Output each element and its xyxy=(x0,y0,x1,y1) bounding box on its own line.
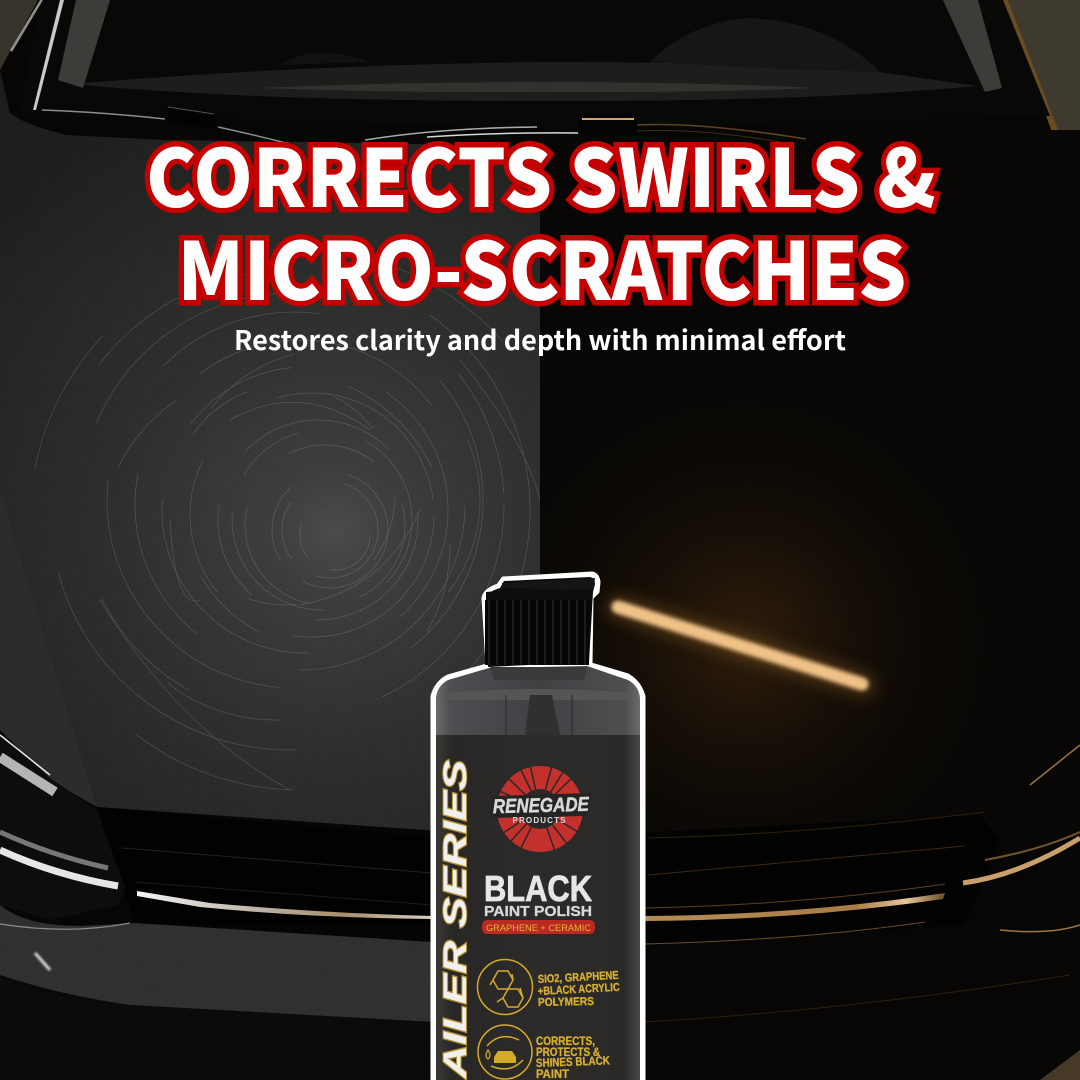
logo sunburst: PRODUCTS xyxy=(512,816,566,825)
hood left half: swirled paint xyxy=(0,70,570,850)
bottle white outline xyxy=(432,573,644,1080)
product name xyxy=(484,868,592,920)
red pill: GRAPHENE + CERAMIC xyxy=(486,923,591,934)
chrome strip left xyxy=(137,891,433,919)
hood right half: corrected paint with light reflection xyxy=(592,130,1080,800)
icon: molecule xyxy=(478,960,532,1014)
bottle body xyxy=(436,666,640,1080)
feature text: ingredients: POLYMERS xyxy=(538,996,594,1009)
product bottle xyxy=(432,573,644,1080)
wipers and cowl trim xyxy=(42,107,806,144)
bumper left xyxy=(0,905,432,1080)
bumper right xyxy=(645,975,1080,1080)
feature text: ingredients: +BLACK ACRYLIC xyxy=(538,982,620,998)
swirl micro-scratches xyxy=(30,250,570,790)
title: CORRECTS SWIRLS & xyxy=(146,115,936,231)
product name: BLACK xyxy=(484,868,592,909)
feature text: benefits: SHINES BLACK xyxy=(536,1053,610,1070)
icon: car with arrows xyxy=(478,1025,532,1079)
subtitle: Restores clarity and depth with minimal effort xyxy=(234,319,846,358)
logo sunburst: RENEGADE xyxy=(493,794,590,818)
headlight right xyxy=(963,745,1080,932)
title xyxy=(146,115,936,324)
garage wall corners xyxy=(0,0,1080,150)
logo sunburst xyxy=(491,765,592,852)
reflected light bar xyxy=(618,607,864,685)
feature text: ingredients xyxy=(538,970,620,1009)
feature text: benefits: PROTECTS & xyxy=(536,1045,600,1059)
feature text: ingredients: SIO2, GRAPHENE xyxy=(538,970,619,986)
product name: PAINT POLISH xyxy=(484,903,592,920)
flip cap xyxy=(485,577,595,667)
windshield pillars xyxy=(58,0,110,88)
bottle label xyxy=(436,735,640,1080)
windshield and dashboard xyxy=(10,0,1050,128)
feature text: benefits: CORRECTS, xyxy=(536,1034,595,1048)
grille xyxy=(97,807,1000,944)
chrome strip right xyxy=(645,893,945,921)
title: MICRO-SCRATCHES xyxy=(178,208,906,324)
headlight left xyxy=(0,732,125,920)
feature text: benefits xyxy=(536,1034,610,1080)
vertical series text: AILER SERIES xyxy=(437,759,473,1079)
